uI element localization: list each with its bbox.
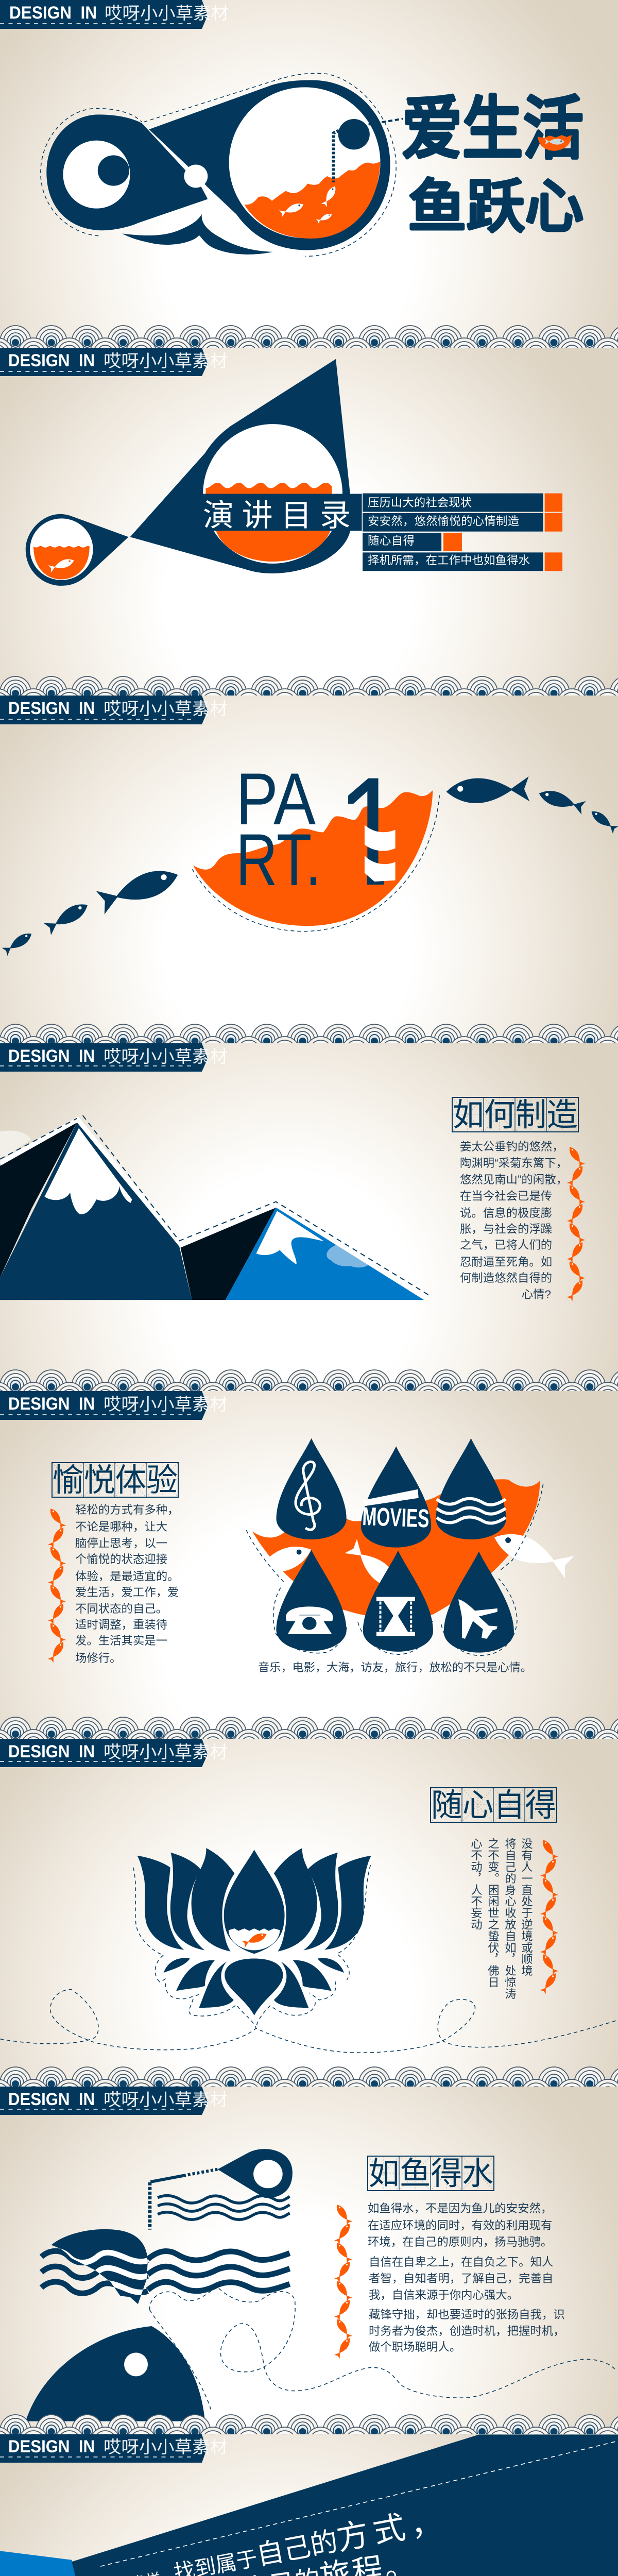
drop: music <box>276 1438 347 1539</box>
wave band <box>0 1369 618 1391</box>
body text: 做个职场聪明人。 <box>369 2341 461 2353</box>
body text: 胀，与社会的浮躁 <box>460 1223 552 1235</box>
movies label: MOVIES <box>362 1502 430 1533</box>
vertical text: 将自己的身心收放自如，处惊涛 <box>504 1838 517 1999</box>
body text: 不论是哪种，让大 <box>75 1520 167 1533</box>
icon: hourglass <box>376 1597 415 1636</box>
top water <box>205 483 332 495</box>
drop: telephone <box>276 1550 347 1651</box>
blue fold <box>0 2551 98 2576</box>
gray cloud <box>0 1131 31 1160</box>
body text: 在适应环境的同时，有效的利用现有 <box>368 2219 552 2232</box>
body text: 我，自信来源于你内心强大。 <box>369 2289 519 2301</box>
header <box>0 1739 228 1767</box>
contents list: 择机所需，在工作中也如鱼得水 <box>368 554 530 567</box>
drop: movies <box>361 1446 431 1548</box>
hump <box>51 2229 148 2304</box>
body text: 忍耐逼至死角。如 <box>460 1256 552 1268</box>
lower water <box>216 531 330 562</box>
small waves <box>158 2196 289 2219</box>
eye <box>63 141 130 209</box>
fish tail lobe <box>46 114 208 230</box>
panel: slide 2 contents <box>0 348 618 696</box>
header: DESIGN IN <box>8 1394 95 1414</box>
white fish <box>240 1526 574 1595</box>
wave band <box>0 2414 618 2434</box>
body text: 环境，在自己的原则内，扬马驰骋。 <box>368 2235 552 2248</box>
fish chain <box>48 1507 66 1663</box>
body text: 藏锋守拙，却也要适时的张扬自我，识 <box>369 2308 565 2321</box>
caption: 音乐，电影，大海，访友，旅行，放松的不只是心情。 <box>258 1661 532 1674</box>
body text: 爱生活，爱工作，爱 <box>75 1586 179 1599</box>
orange water shape <box>252 1479 540 1618</box>
header: 哎呀小小草素材 <box>104 351 228 370</box>
navy ball <box>338 119 370 149</box>
dashed seams <box>100 2441 618 2576</box>
blue mountain <box>226 1208 425 1300</box>
title: 演讲目录 <box>203 498 351 533</box>
leaping fish <box>2 776 618 956</box>
title <box>402 91 583 239</box>
wave band <box>0 1717 618 1739</box>
icon: airplane <box>458 1599 497 1639</box>
header <box>0 0 229 29</box>
white ridge margin <box>0 1120 426 1299</box>
wave band <box>0 325 618 348</box>
header <box>0 2434 228 2463</box>
body text: 场修行。 <box>75 1652 122 1665</box>
big waves right <box>148 2251 289 2291</box>
drop: sea <box>436 1438 506 1539</box>
orange water <box>244 161 381 239</box>
body text: 如鱼得水，不是因为鱼儿的安安然， <box>368 2202 552 2215</box>
fish chain <box>567 1145 585 1301</box>
wave band <box>0 1024 618 1043</box>
heading box: 如何制造 <box>453 1097 578 1133</box>
contents list: 随心自得 <box>368 534 415 547</box>
icon: telephone <box>286 1606 333 1621</box>
bowl in title <box>538 135 572 151</box>
big fish head <box>26 2326 205 2421</box>
body text: 自信在自卑之上，在自负之下。知人 <box>369 2256 553 2268</box>
white wave stripes <box>365 825 396 882</box>
body text: 轻松的方式有多种， <box>75 1503 179 1516</box>
drop: plane <box>444 1551 514 1653</box>
body text <box>75 1503 179 1665</box>
bowl interior <box>229 87 381 238</box>
dashed rim <box>192 795 439 931</box>
small water <box>33 546 90 579</box>
lower center petal <box>225 1958 283 2015</box>
drop: hourglass <box>363 1550 433 1652</box>
wave band <box>0 2066 618 2087</box>
icon: waves <box>437 1499 506 1523</box>
small bowl interior <box>30 518 93 580</box>
vertical text <box>470 1838 533 1999</box>
contents list: 安安然，悠然愉悦的心情制造 <box>368 515 519 528</box>
body text: 陶渊明“采菊东篱下， <box>460 1157 568 1170</box>
dashed threads <box>0 1865 618 2053</box>
joint ball <box>184 165 208 188</box>
illustration: funnel bowls <box>26 359 362 586</box>
tail hole <box>253 2160 283 2188</box>
header <box>0 2087 228 2115</box>
title: 爱生活 <box>402 91 583 167</box>
body text: 发。生活其实是一 <box>75 1634 167 1647</box>
waves on hump <box>41 2251 148 2293</box>
fishing line <box>333 130 339 182</box>
big waves left <box>41 2251 148 2293</box>
line from tail <box>150 2170 217 2230</box>
body text: 适时调整，重装待 <box>75 1618 167 1631</box>
main navy mountain <box>0 1121 192 1300</box>
dark valley <box>181 1208 276 1300</box>
body text <box>368 2202 565 2353</box>
heading box: 如鱼得水 <box>368 2156 493 2192</box>
banner <box>0 2434 618 2576</box>
body text: 个愉悦的状态迎接 <box>75 1553 167 1566</box>
fish body <box>149 80 390 250</box>
header: 哎呀小小草素材 <box>104 2437 228 2456</box>
body text: 之气，已将人们的 <box>460 1239 552 1251</box>
PART 1 text: RT. <box>236 819 321 901</box>
illustration: fish and waves <box>26 2149 615 2421</box>
PART 1 text <box>241 774 384 885</box>
body text: 者智，自知者明，了解自己，完善自 <box>369 2272 553 2285</box>
heading box: 随心自得 <box>431 1788 556 1823</box>
header: 哎呀小小草素材 <box>104 699 228 718</box>
dashed outlines <box>246 1484 543 1655</box>
header: DESIGN IN <box>9 3 97 23</box>
panel: slide 3 part one <box>0 696 618 1043</box>
vertical text: 没有人一直处于逆境或顺境 <box>520 1838 533 1976</box>
navy ribbon <box>72 2434 618 2576</box>
body text: 姜太公垂钓的悠然， <box>460 1140 564 1153</box>
header: DESIGN IN <box>8 2090 95 2109</box>
bowl in petal <box>229 1928 280 1950</box>
PART 1 text: 1 <box>336 744 405 918</box>
header: DESIGN IN <box>8 1742 95 1761</box>
drops and icons <box>246 1438 543 1655</box>
background <box>0 0 618 348</box>
panel: slide 1 cover <box>0 0 618 348</box>
small bowl <box>26 514 128 586</box>
PART 1 text: PA <box>236 758 316 840</box>
panel: slide 8 banner <box>0 2434 618 2576</box>
header <box>0 1043 228 1072</box>
header: 哎呀小小草素材 <box>104 1047 228 1066</box>
wave band <box>0 676 618 696</box>
illustration: fish with bowl <box>41 73 403 256</box>
fish in bowl <box>279 184 338 224</box>
body text: 心情? <box>522 1288 551 1301</box>
tail drop <box>217 2149 293 2198</box>
background <box>0 696 618 1043</box>
background <box>0 348 618 696</box>
panel: slide 4 how to create <box>0 1043 618 1391</box>
lotus fish <box>242 1931 268 1947</box>
body text: 时务者为俊杰，创造时机，把握时机， <box>369 2325 565 2337</box>
dashed trail <box>150 2286 615 2410</box>
center petal <box>224 1850 285 1954</box>
icon: treble clef <box>296 1462 320 1530</box>
small snow cap <box>256 1211 324 1264</box>
title: 鱼跃心 <box>408 175 583 239</box>
lotus <box>0 1848 618 2053</box>
header: DESIGN IN <box>8 2437 95 2456</box>
big snow cap <box>44 1128 132 1214</box>
panel: slide 7 fish in water <box>0 2087 618 2434</box>
body text: 不同状态的自己。 <box>75 1602 167 1615</box>
header: 哎呀小小草素材 <box>104 1395 228 1414</box>
mountains <box>0 1115 430 1300</box>
inner white bowl <box>203 424 342 564</box>
background <box>0 1391 618 1739</box>
orange bowl <box>192 790 439 931</box>
background <box>0 2087 618 2434</box>
body text: 脑停止思考，以一 <box>75 1537 167 1550</box>
dashed outline <box>41 73 396 256</box>
panel: slide 6 at ease <box>0 1739 618 2087</box>
fish chain <box>540 1838 558 1994</box>
contents list: 压历山大的社会现状 <box>368 496 472 509</box>
body text: 在当今社会已是传 <box>460 1190 552 1202</box>
contents list <box>363 494 562 571</box>
header <box>0 696 228 724</box>
body text: 悠然见南山”的闲散， <box>460 1173 568 1186</box>
right petals <box>274 1848 371 1952</box>
vertical text: 之不变。困闲世之蛰伏，佛日 <box>486 1838 500 1988</box>
heading box: 愉悦体验 <box>53 1463 178 1498</box>
background <box>0 1739 618 2087</box>
header <box>0 1391 228 1420</box>
header <box>0 348 228 376</box>
dark left face <box>0 1121 78 1278</box>
header: DESIGN IN <box>8 351 95 370</box>
header: 哎呀小小草素材 <box>104 2090 228 2109</box>
header: 哎呀小小草素材 <box>104 1742 228 1761</box>
body text: 何制造悠然自得的 <box>460 1272 552 1284</box>
background <box>0 1043 618 1391</box>
title band <box>203 494 362 531</box>
body text: 说。信息的极度膨 <box>460 1207 552 1219</box>
header: DESIGN IN <box>8 699 95 718</box>
fish fin <box>122 214 273 255</box>
dashed ridge <box>0 1115 430 1296</box>
header: 哎呀小小草素材 <box>105 4 229 23</box>
lower right petals <box>274 1958 344 2008</box>
big fish eye <box>124 2352 148 2376</box>
lower left petals <box>164 1958 234 2008</box>
fish chain <box>334 2203 352 2359</box>
background <box>0 2434 618 2576</box>
small fish <box>48 557 75 572</box>
body text: 体验，是最适宜的。 <box>75 1570 179 1583</box>
left petals <box>137 1848 234 1952</box>
body text <box>460 1140 568 1301</box>
panel: slide 5 joyful experience <box>0 1391 618 1739</box>
dashed cord <box>369 119 403 125</box>
big funnel <box>130 359 350 573</box>
pale cloud <box>327 1243 369 1267</box>
vertical text: 心不动，人不妄动 <box>470 1838 483 1930</box>
header: DESIGN IN <box>8 1046 95 1066</box>
